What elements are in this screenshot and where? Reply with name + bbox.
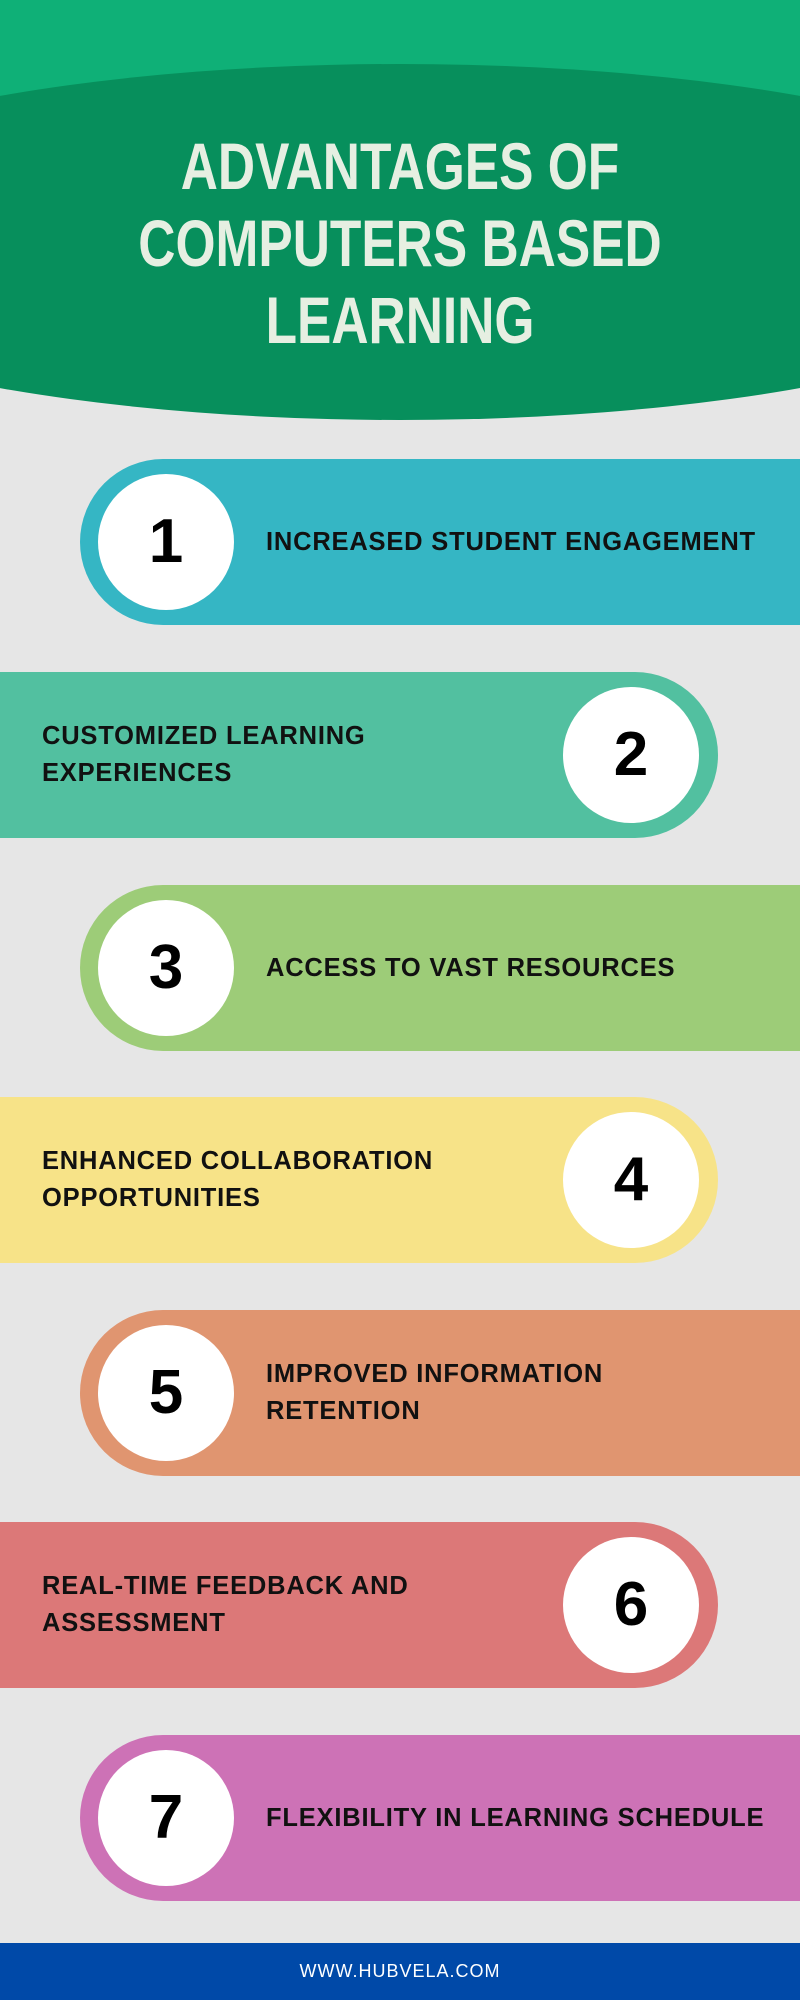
item 7 [80, 1735, 800, 1901]
footer [0, 1943, 800, 2000]
item 2 [0, 672, 718, 838]
header background [0, 0, 800, 240]
item 2: 2 [614, 720, 648, 789]
title: LEARNING [266, 283, 534, 357]
item 6 [0, 1522, 718, 1688]
title [138, 129, 662, 357]
item 6: 6 [614, 1570, 648, 1639]
item 5: IMPROVED INFORMATION [266, 1360, 603, 1388]
item 1: 1 [149, 507, 183, 576]
item 1: INCREASED STUDENT ENGAGEMENT [266, 528, 756, 556]
item 4: OPPORTUNITIES [42, 1184, 261, 1212]
item 5 [80, 1310, 800, 1476]
item 5: 5 [149, 1358, 183, 1427]
item 4 [0, 1097, 718, 1263]
item 5: RETENTION [266, 1397, 421, 1425]
item 7: 7 [149, 1783, 183, 1852]
title: COMPUTERS BASED [138, 206, 662, 280]
footer: WWW.HUBVELA.COM [299, 1961, 500, 1981]
item 3 [80, 885, 800, 1051]
item 6: REAL-TIME FEEDBACK AND [42, 1572, 409, 1600]
item 3: 3 [149, 933, 183, 1002]
title: ADVANTAGES OF [181, 129, 619, 203]
item 2: EXPERIENCES [42, 759, 232, 787]
item 2: CUSTOMIZED LEARNING [42, 722, 366, 750]
item 4: ENHANCED COLLABORATION [42, 1147, 433, 1175]
header ellipse [0, 64, 800, 420]
item 4: 4 [614, 1145, 648, 1214]
item 1 [80, 459, 800, 625]
item 6: ASSESSMENT [42, 1609, 226, 1637]
item 7: FLEXIBILITY IN LEARNING SCHEDULE [266, 1804, 764, 1832]
item 3: ACCESS TO VAST RESOURCES [266, 954, 675, 982]
